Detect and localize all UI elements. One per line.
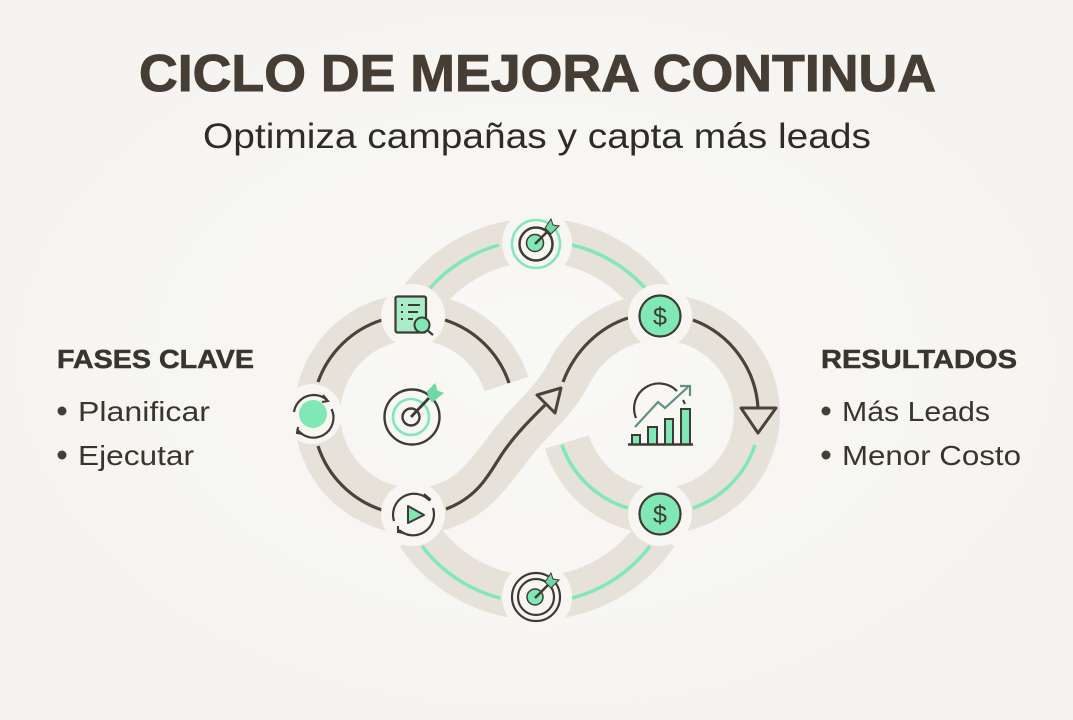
- list item: ejecutar: Ejecutar: [78, 440, 194, 471]
- heading: fases clave: FASES CLAVE: [57, 344, 254, 374]
- arrow head: right loop: [741, 408, 776, 433]
- beige track bands: [317, 240, 757, 598]
- node: document search: [381, 284, 445, 348]
- node: dollar top: [628, 284, 692, 348]
- node: play: [381, 482, 445, 546]
- dark flow line: left loop: [318, 320, 509, 510]
- list item: menor costo: Menor Costo: [842, 440, 1021, 471]
- dark flow line: s curve: [446, 318, 628, 509]
- subtitle: Optimiza campañas y capta más leads: [203, 117, 871, 156]
- list item: planificar: Planificar: [78, 396, 210, 427]
- panel: fases clave: [57, 344, 254, 471]
- heading: resultados: RESULTADOS: [821, 344, 1017, 374]
- node: target bottom: [502, 562, 572, 632]
- diagram: infinity improvement loop: [282, 208, 776, 632]
- green flow lines: [422, 245, 755, 598]
- list item: más leads: Más Leads: [842, 396, 990, 427]
- icon: center target: [384, 384, 443, 444]
- node: dollar bottom: $: [653, 501, 667, 529]
- icon: growth chart: [628, 383, 693, 444]
- node: refresh left: [282, 384, 342, 444]
- dark flow line: right loop: [693, 320, 758, 408]
- node: target top: [502, 208, 572, 278]
- title: CICLO DE MEJORA CONTINUA: [139, 45, 936, 103]
- arrow head: s curve: [537, 388, 561, 413]
- panel: resultados: [821, 344, 1021, 471]
- node: dollar bottom: [628, 482, 692, 546]
- node: dollar top: $: [653, 303, 667, 331]
